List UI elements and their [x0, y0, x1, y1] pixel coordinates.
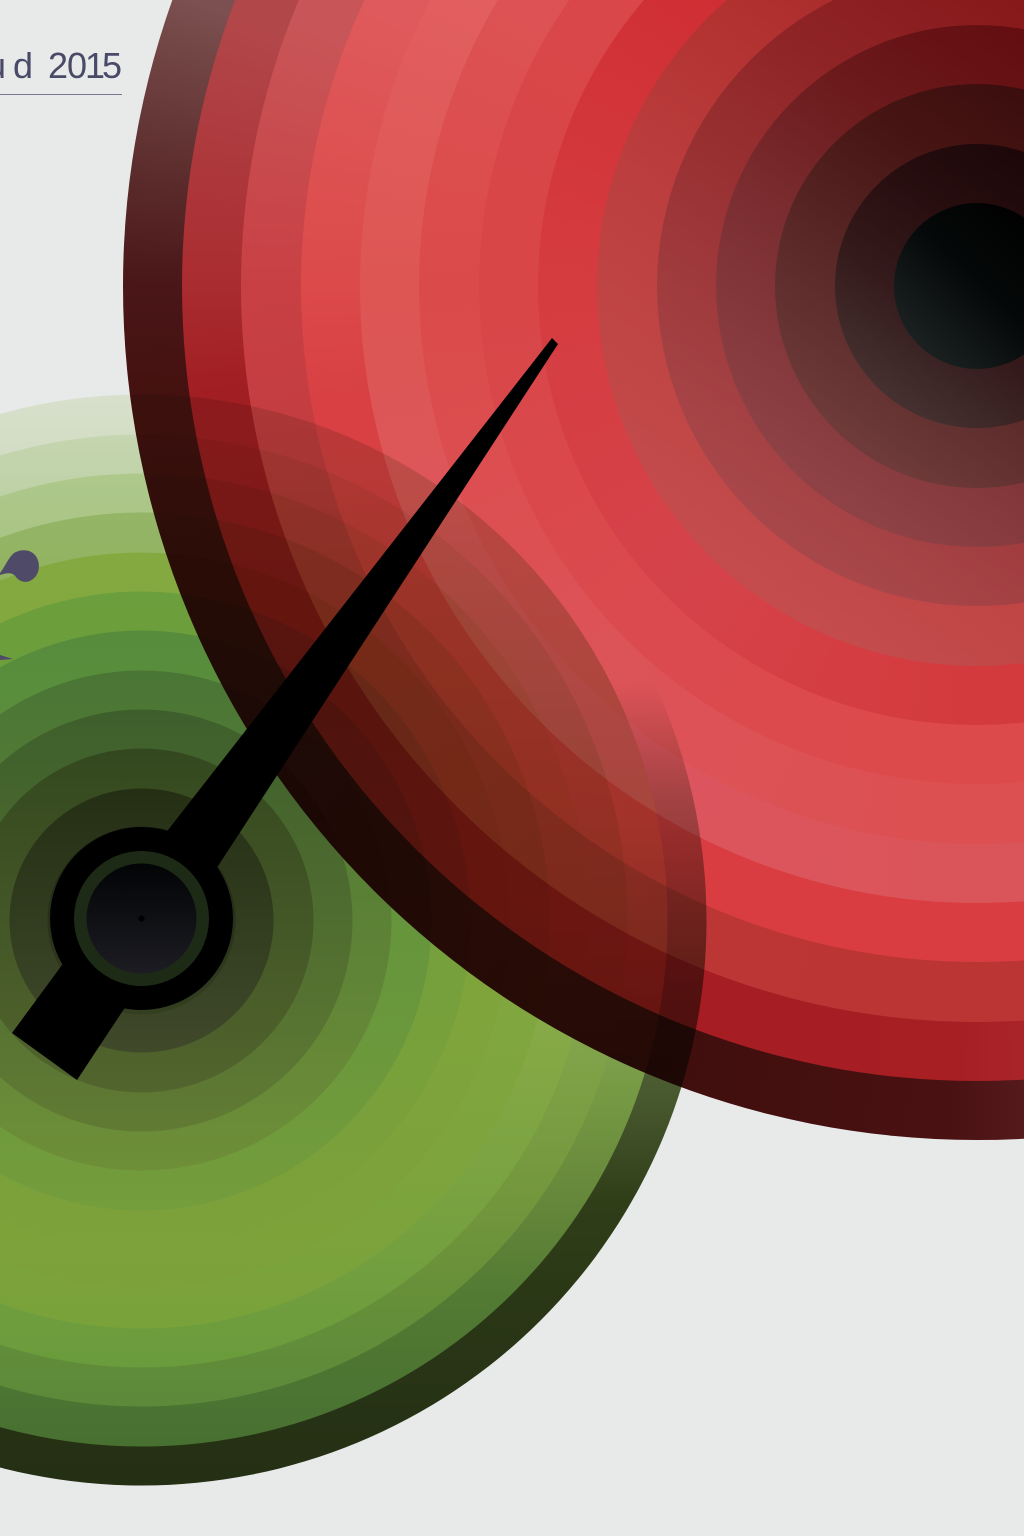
green rings showing through the red target — [130, 396, 706, 1088]
